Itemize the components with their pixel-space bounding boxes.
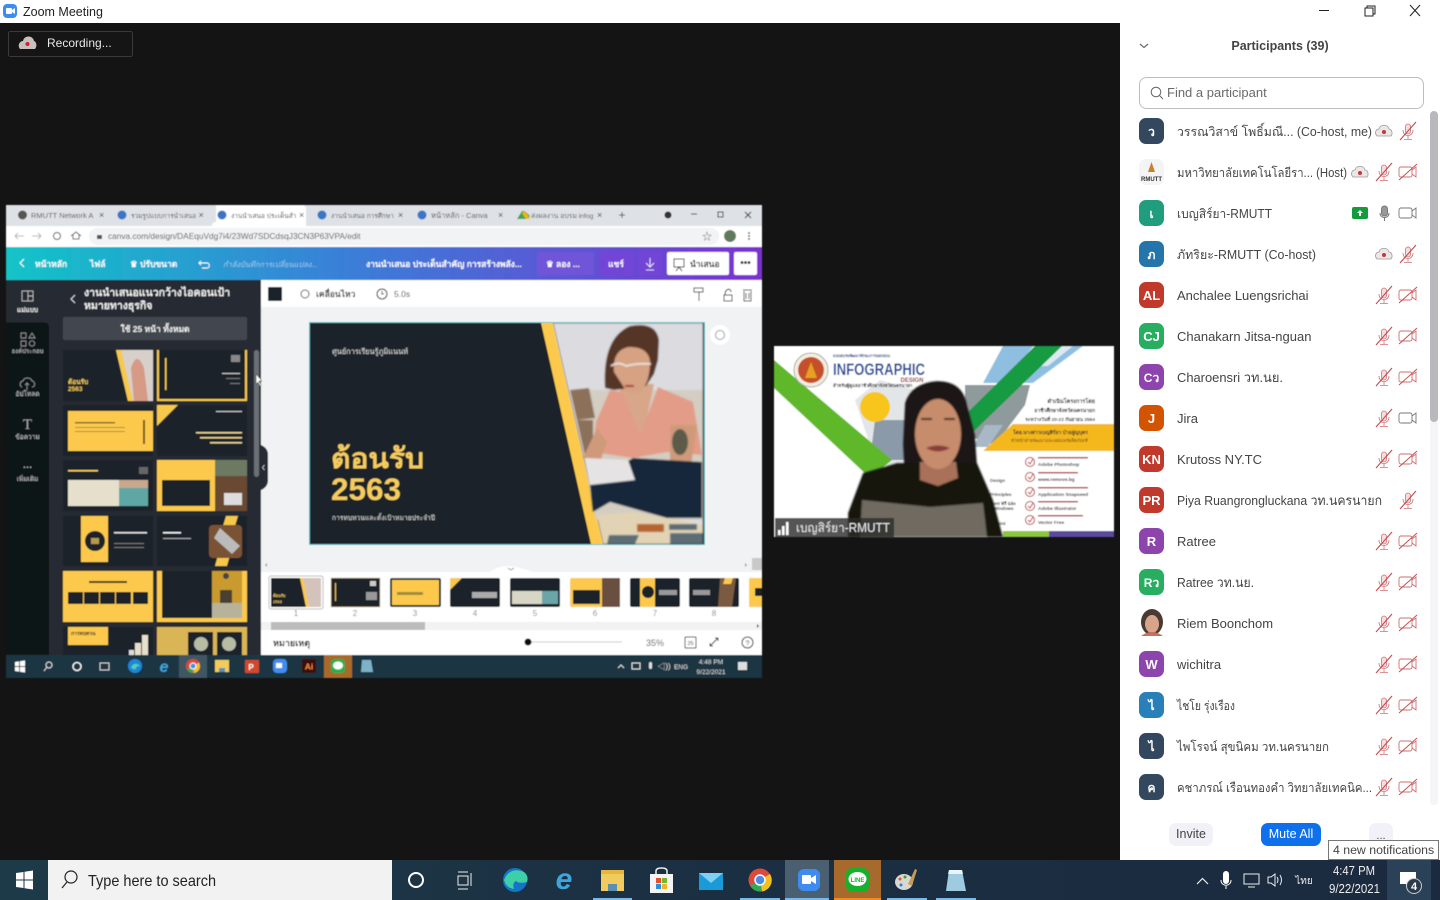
- poster organiser text: ระหว่างวันที่ 20-22 กันยายน 2564: [1025, 415, 1095, 423]
- element toolbar: เคลื่อนไหว: [316, 287, 356, 299]
- participant 14: W: [1145, 657, 1158, 672]
- participant 4: ภ: [1148, 248, 1156, 262]
- poster left checklist text: [990, 478, 1017, 526]
- inner windows taskbar: e: [160, 659, 169, 676]
- title bar: [0, 0, 1120, 23]
- rail item: upload: [15, 378, 40, 398]
- notes and zoom bar: 35%: [646, 638, 664, 648]
- tab: canva home: [418, 210, 503, 220]
- participant 16: [1139, 733, 1417, 759]
- element toolbar: [261, 280, 762, 307]
- canva top toolbar: งานนำเสนอ ประเด็นสำคัญ การสร้างพลัง...: [366, 257, 522, 270]
- template thumbnail 8: [157, 516, 247, 566]
- poster checklist: [1026, 457, 1088, 526]
- tab: rmutt network: ×: [99, 210, 104, 220]
- participant 11: R: [1147, 534, 1157, 549]
- participant 10: Piya Ruangrongluckana วท.นครนายก: [1177, 493, 1382, 508]
- use all pages button: ใช้ 25 หน้า ทั้งหมด: [120, 322, 190, 334]
- poster checklist: Application Snapseed: [1038, 492, 1088, 498]
- participant 7: [1139, 364, 1417, 390]
- poster checklist: Adobe Illustrator: [1038, 506, 1077, 512]
- strip thumbnail 8: [689, 578, 739, 607]
- template thumbnail 1: ต้อนรับ: [68, 377, 88, 386]
- slide yellow stripe: [541, 323, 603, 544]
- template thumbnail 1: [63, 350, 153, 401]
- icon: store: [650, 868, 673, 893]
- inner system tray: ◁)): [657, 662, 671, 671]
- rail item: text: [15, 417, 40, 441]
- poster title: INFOGRAPHIC: [833, 361, 925, 379]
- participant 2: มหาวิทยาลัยเทคโนโลยีรา... (Host): [1177, 165, 1347, 180]
- icon: file explorer: [593, 870, 632, 900]
- more button: ...: [1376, 830, 1386, 842]
- poster yellow banner: โดย.นางสาวเบญสิร์ยา ป่าอยู่ญบุตร: [1012, 429, 1088, 437]
- poster yellow banner: [983, 424, 1114, 451]
- tab: template: [118, 210, 204, 220]
- participant 1: วรรณวิสาข์ โพธิ์มณี... (Co-host, me): [1177, 122, 1372, 139]
- template side panel: หมายทางธุรกิจ: [84, 300, 152, 313]
- invite button: Invite: [1176, 827, 1206, 841]
- slide small title: ศูนย์การเรียนรู้ภูมิแนนท์: [332, 347, 408, 356]
- canvas area: [261, 280, 762, 655]
- tab: google drive: [517, 210, 602, 220]
- clock: 4:47 PM: [1333, 863, 1375, 878]
- participant 13: [1141, 609, 1417, 636]
- icon: paint: [887, 869, 927, 900]
- tab: google drive: ส่งผลงาน อบรม infog: [531, 213, 594, 220]
- tab: canva home: ×: [498, 210, 503, 220]
- icon: chrome: [740, 868, 780, 900]
- participant search box: Find a participant: [1167, 85, 1267, 100]
- presenter video panel: [774, 346, 1114, 537]
- inner windows taskbar: [6, 655, 762, 678]
- strip thumbnail 9: [749, 578, 762, 607]
- slide numbers: [294, 609, 717, 618]
- poster left checklist text: erPoint: [990, 521, 1006, 526]
- template side panel: [49, 280, 261, 655]
- poster left checklist text: e Windows: [990, 506, 1014, 511]
- poster title: แบบอบรมพัฒนาทักษะการออกแบบ: [833, 353, 891, 358]
- strip thumbnail 6: [570, 578, 620, 607]
- notification centre: 4: [1411, 881, 1418, 893]
- panel header: Participants (39): [1231, 39, 1329, 53]
- clock: [1329, 863, 1380, 896]
- rail item: text: ข้อความ: [15, 433, 40, 441]
- panel heading: งานนำเสนอแนวกว้างไอคอนเป้า: [84, 286, 230, 299]
- poster yellow banner: หัวหน้าฝ่ายพัฒนาและเผยแพร่ผลิตภัณฑ์: [1011, 437, 1088, 443]
- participants panel: [1120, 0, 1440, 860]
- participant 17: [1139, 774, 1417, 800]
- strip thumbnail 3: [390, 578, 441, 607]
- poster organiser text: ดำเนินโครงการโดย: [1048, 397, 1095, 405]
- rail item: more: เพิ่มเติม: [17, 474, 38, 483]
- tab: template: ×: [198, 210, 204, 220]
- poster green diagonals: [774, 346, 1062, 478]
- tab: presentation education: [318, 210, 403, 220]
- template thumbnail 12: [157, 627, 247, 655]
- participant 16: ไพโรจน์ สุขนิคม วท.นครนายก: [1176, 739, 1329, 755]
- slide numbers: 4: [473, 609, 478, 618]
- notes and zoom bar: หมายเหตุ: [273, 638, 310, 649]
- canva top toolbar: •••: [740, 258, 751, 269]
- icon: mail: [699, 873, 723, 890]
- participant 10: [1139, 487, 1416, 513]
- participant 16: ไ: [1146, 739, 1155, 754]
- template thumbnail 11: การทบทวน: [71, 631, 96, 637]
- comment bubble button: [710, 325, 730, 345]
- rail item: elements: [12, 333, 44, 355]
- participant 6: [1139, 323, 1417, 349]
- poster organiser text: [1025, 397, 1095, 423]
- participant 3: เ: [1149, 207, 1154, 221]
- window controls: [1319, 5, 1420, 16]
- keyboard language: ไทย: [1294, 875, 1313, 887]
- tab: rmutt network: RMUTT Network A: [31, 211, 93, 220]
- browser address bar: canva.com/design/DAEquVdg7i4/23Wd7SDCdsqJ3CN3P63VPA/edit: [108, 231, 361, 241]
- system tray: [1197, 860, 1431, 900]
- rail item: text: T: [23, 417, 32, 433]
- icon: notepad: [936, 870, 976, 900]
- participant 2: [1139, 159, 1417, 185]
- notification centre: [1387, 860, 1431, 900]
- canva top toolbar: กำลังบันทึกการเปลี่ยนแปลง...: [223, 259, 318, 269]
- slide numbers: 6: [593, 609, 598, 618]
- browser address bar: ☆: [702, 231, 712, 243]
- canva left icon rail: [6, 280, 49, 655]
- icon: zoom: [785, 860, 829, 900]
- slide photo: woman with papers: [553, 323, 703, 544]
- slide numbers: 8: [712, 609, 717, 618]
- strip thumbnail 4: [450, 578, 500, 607]
- tab: active presentation: [218, 210, 304, 220]
- panel scrollbar: [254, 350, 259, 477]
- poster background: sky and building: [855, 346, 1083, 480]
- poster checklist: Adobe Photoshop: [1038, 462, 1079, 468]
- poster yellow circle: [860, 392, 890, 422]
- tab: rmutt network: [18, 210, 104, 220]
- notes and zoom bar: 25: [687, 641, 694, 647]
- element toolbar: 5.0s: [394, 289, 410, 299]
- inner windows taskbar: Ai: [305, 662, 313, 672]
- use all pages button: [63, 317, 247, 340]
- template thumbnail 7: [63, 516, 153, 566]
- slide numbers: 2: [353, 609, 358, 618]
- template thumbnail 4: [157, 405, 247, 456]
- participant list: [1139, 118, 1417, 800]
- participant 5: AL: [1143, 288, 1160, 303]
- inner windows taskbar: P: [248, 663, 254, 672]
- tab: google drive: ×: [597, 210, 602, 220]
- tab: presentation education: ×: [398, 210, 403, 220]
- participant 5: [1139, 282, 1417, 308]
- canva top toolbar: [6, 247, 762, 280]
- icon: cortana: [409, 873, 423, 887]
- strip thumbnail 2: [331, 578, 380, 607]
- slide numbers: 5: [533, 609, 538, 618]
- canva top toolbar: ♛ ลอง ...: [546, 259, 580, 269]
- search box: [48, 860, 392, 900]
- participant 1: ว: [1148, 125, 1155, 139]
- template thumbnail 2: [157, 350, 247, 401]
- icon: internet explorer: e: [556, 863, 572, 896]
- slide numbers: 3: [413, 609, 418, 618]
- template thumbnail 10: [157, 571, 247, 622]
- participant 15: [1139, 692, 1417, 718]
- notifications tooltip: [1328, 840, 1438, 860]
- icon: edge: [503, 868, 528, 892]
- slide subtitle: การทบทวนและตั้งเป้าหมายประจำปี: [332, 513, 435, 522]
- slide preview: [310, 322, 704, 544]
- search box: Type here to search: [88, 873, 216, 890]
- poster checklist: Vector Free: [1038, 520, 1064, 526]
- poster title: สำหรับผู้ดูแลอาชีวศึกษาจังหวัดนครนายก: [833, 382, 913, 389]
- participant 8: [1139, 405, 1416, 431]
- new tab button: +: [618, 208, 626, 222]
- rail item: templates: [17, 291, 38, 314]
- participant 13: Riem Boonchom: [1177, 616, 1273, 631]
- participant 8: Jira: [1177, 411, 1199, 426]
- browser tab strip: [6, 205, 762, 226]
- participant 17: ค: [1147, 781, 1156, 795]
- participant 2: RMUTT: [1141, 177, 1162, 183]
- participant 9: [1139, 446, 1417, 472]
- window title: Zoom Meeting: [23, 5, 103, 19]
- canva top toolbar: หน้าหลัก: [35, 259, 67, 269]
- inner system tray: 9/22/2021: [697, 669, 726, 676]
- participant 11: [1139, 528, 1417, 554]
- clock: 9/22/2021: [1329, 881, 1380, 896]
- strip thumbnail 1 (selected): 2563: [273, 599, 283, 604]
- tab: active presentation: งานนำเสนอ ประเด็นสำ: [231, 211, 297, 220]
- poster bottom colour strip: [1003, 531, 1114, 537]
- inner system tray: ENG: [674, 664, 688, 671]
- presenter name tag: เบญสิร์ยา-RMUTT: [796, 521, 890, 535]
- strip scrollbar: [261, 622, 762, 630]
- notifications tooltip: 4 new notifications: [1333, 843, 1434, 857]
- slide year: 2563: [331, 471, 401, 507]
- participant 1: [1139, 118, 1416, 144]
- slide numbers: 7: [653, 609, 658, 618]
- poster left checklist text: Principles: [990, 492, 1012, 497]
- poster title: DESIGN: [900, 378, 924, 384]
- participant 10: PR: [1142, 493, 1161, 508]
- canva top toolbar: ♛ ปรับขนาด: [130, 259, 178, 269]
- poster left checklist text: Font ฟรี และ: [990, 500, 1017, 506]
- rail item: templates: แม่แบบ: [17, 306, 38, 314]
- participant 14: wichitra: [1176, 657, 1222, 672]
- slide heading: ต้อนรับ: [331, 443, 424, 474]
- browser address bar: [6, 226, 762, 247]
- inner system tray: [618, 659, 747, 676]
- invite button: [1169, 823, 1213, 846]
- participant 12: Ratree วท.นย.: [1177, 575, 1254, 590]
- slide numbers: 1: [294, 609, 299, 618]
- windows taskbar: [0, 860, 1440, 900]
- presenter: [848, 381, 1003, 537]
- inner system tray: 4:48 PM: [699, 659, 723, 666]
- participant 7: Cว: [1144, 371, 1159, 385]
- participant search box: [1140, 78, 1424, 108]
- recording indicator: Recording...: [47, 36, 112, 50]
- participant 9: KN: [1142, 452, 1161, 467]
- tab: template: รวมรูปแบบการนำเสนอ: [131, 212, 196, 220]
- participant list scrollbar: [1430, 111, 1438, 805]
- strip thumbnail 7: [630, 578, 680, 607]
- participant 15: ไชโย รุ่งเรือง: [1176, 698, 1235, 714]
- participant 12: Rว: [1144, 576, 1159, 590]
- participant 4: ภัทริยะ-RMUTT (Co-host): [1177, 248, 1316, 262]
- rail item: more: [17, 465, 38, 483]
- tab: canva home: หน้าหลัก - Canva: [431, 211, 489, 220]
- poster checklist: www.remove.bg: [1037, 477, 1075, 483]
- canva top toolbar: นำเสนอ: [690, 259, 720, 269]
- tab: presentation education: งานนำเสนอ การศึกษา: [331, 212, 394, 220]
- canva top toolbar: ไฟล์: [89, 259, 106, 269]
- shared screen: browser with canva: [6, 205, 762, 678]
- template thumbnail 11: [63, 627, 153, 655]
- browser window controls: [664, 212, 751, 218]
- panel header: [1140, 39, 1329, 53]
- presenter name tag: [775, 518, 894, 537]
- template thumbnail 5: [63, 460, 153, 511]
- mute all button: Mute All: [1269, 827, 1313, 841]
- participant 17: คชาภรณ์ เรือนทองคำ วิทยาลัยเทคนิค...: [1177, 781, 1372, 795]
- icon: task view: [458, 872, 471, 889]
- participant 8: J: [1148, 411, 1155, 426]
- collapse handle: [261, 445, 268, 490]
- template thumbnail 3: [63, 405, 153, 456]
- participant 3: [1139, 200, 1416, 226]
- poster logo: [794, 353, 828, 387]
- rail item: upload: อัปโหลด: [15, 390, 40, 398]
- mute all button: [1261, 823, 1321, 846]
- participant 6: Chanakarn Jitsa-nguan: [1177, 329, 1311, 344]
- canva top toolbar: แชร์: [608, 259, 624, 269]
- participant 9: Krutoss NY.TC: [1177, 452, 1262, 467]
- template thumbnail 9: [63, 571, 153, 622]
- strip thumbnail 1 (selected): ต้อนรับ: [273, 592, 286, 598]
- poster title: [833, 353, 925, 389]
- mouse cursor: [256, 374, 262, 386]
- poster organiser text: อาชีวศึกษาจังหวัดนครนายก: [1034, 407, 1095, 414]
- notes and zoom bar: [273, 637, 753, 649]
- participant 5: Anchalee Luengsrichai: [1177, 288, 1309, 303]
- template thumbnail 1: 2563: [68, 386, 83, 393]
- rail item: elements: องค์ประกอบ: [12, 347, 44, 355]
- poster left checklist text: Design: [990, 478, 1005, 483]
- notes and zoom bar: ?: [745, 638, 750, 648]
- template thumbnail 6: [157, 460, 247, 511]
- participant 12: [1139, 569, 1417, 595]
- rail item: more: • • •: [23, 465, 32, 471]
- strip thumbnail 5: [510, 578, 560, 607]
- participant 3: เบญสิร์ยา-RMUTT: [1177, 207, 1272, 221]
- participant 7: Charoensri วท.นย.: [1177, 370, 1283, 385]
- icon: line: [834, 860, 881, 900]
- participant 11: Ratree: [1177, 534, 1216, 549]
- strip thumbnail 1 (selected): [269, 576, 323, 609]
- tab: active presentation: ×: [299, 210, 304, 220]
- icon: zoom logo: [3, 4, 17, 18]
- participant 14: [1139, 651, 1417, 677]
- slide thumbnail strip: [261, 558, 762, 655]
- participant 4: [1139, 241, 1416, 267]
- icon: start: [16, 870, 33, 890]
- participant 6: CJ: [1143, 329, 1160, 344]
- participant 15: ไ: [1146, 698, 1155, 713]
- recording indicator: [8, 32, 132, 56]
- more button: [1369, 823, 1393, 846]
- icon: line: LINE: [851, 878, 864, 884]
